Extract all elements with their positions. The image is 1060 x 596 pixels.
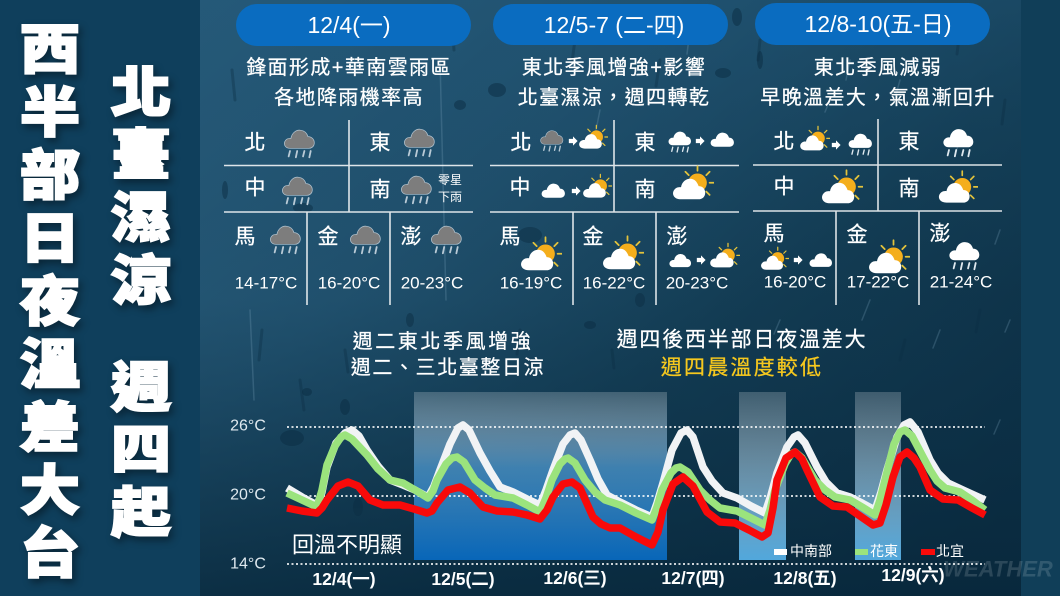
title column: 西半部日夜溫差大台	[20, 7, 80, 589]
title column: 北臺濕涼 週四起: 涼	[111, 238, 171, 316]
temperatures 12/8-10: 21-24°C	[930, 272, 992, 292]
heading 12/4: 各地降雨機率高	[274, 86, 424, 109]
heading 12/8-10: 東北季風減弱	[814, 56, 942, 79]
regions 12/4	[234, 132, 422, 248]
series: 花東	[287, 430, 985, 525]
regions 12/8-10	[764, 130, 950, 246]
background rain photo	[200, 0, 1021, 596]
legend: 中南部	[790, 543, 832, 559]
heading 12/5-7: 北臺濕涼，週四轉乾	[518, 86, 710, 109]
title column: 西半部日夜溫差大台: 大	[20, 448, 80, 526]
date labels: 12/8(五)	[773, 568, 837, 588]
series: 中南部	[287, 422, 985, 517]
legend	[774, 543, 964, 559]
heading 12/4	[246, 56, 452, 109]
date pill 12/8-10: 12/8-10(五-日)	[805, 11, 951, 37]
regions 12/5-7: 北	[510, 132, 532, 154]
temperatures 12/8-10: 17-22°C	[847, 272, 909, 292]
date labels: 12/6(三)	[543, 568, 607, 588]
regions 12/5-7	[500, 132, 688, 248]
regions 12/4: 澎	[400, 226, 422, 248]
temperatures 12/4: 16-20°C	[318, 274, 380, 292]
regions 12/8-10: 北	[774, 130, 794, 154]
title column: 西半部日夜溫差大台: 溫	[20, 322, 80, 400]
temperatures 12/4	[235, 274, 463, 292]
regions 12/4: 金	[318, 226, 338, 248]
panel: 12/8-10 forecast	[753, 3, 1002, 305]
title column: 西半部日夜溫差大台: 西	[20, 7, 80, 85]
title column: 北臺濕涼 週四起: 北	[111, 50, 171, 128]
callout: northeast monsoon: 週二東北季風增強	[353, 330, 533, 353]
regions 12/4: 東	[370, 132, 390, 154]
callout: day-night difference	[617, 328, 867, 380]
weather icons 12/4	[270, 129, 461, 253]
regions 12/8-10: 東	[898, 130, 920, 154]
left title band	[0, 0, 200, 596]
weather icons 12/5-7	[521, 125, 740, 270]
regions 12/4: 馬	[234, 226, 256, 248]
temperatures 12/8-10	[764, 272, 992, 292]
temperatures 12/5-7: 16-19°C	[500, 274, 562, 292]
title column: 北臺濕涼 週四起: 四	[111, 407, 171, 485]
regions 12/5-7: 東	[634, 132, 656, 154]
title column: 北臺濕涼 週四起: 週	[111, 345, 171, 423]
note: scattered showers	[438, 173, 462, 204]
date pill 12/5-7	[493, 4, 728, 45]
regions 12/5-7: 中	[510, 176, 530, 200]
axis labels: 20°C	[230, 486, 266, 504]
note: scattered showers: 零星	[438, 173, 462, 187]
line chart: temperature trend	[230, 392, 985, 589]
regions 12/5-7: 澎	[666, 226, 688, 248]
regions 12/4: 南	[370, 178, 390, 202]
date labels: 12/9(六)	[881, 565, 945, 585]
callout: northeast monsoon: 週二、三北臺整日涼	[351, 356, 545, 379]
note: little warming: 回溫不明顯	[292, 532, 402, 558]
date pill 12/4: 12/4(一)	[307, 12, 391, 38]
title column: 北臺濕涼 週四起: 臺	[111, 112, 171, 190]
date pill 12/4	[236, 4, 471, 46]
regions 12/8-10: 南	[898, 178, 920, 200]
title column: 北臺濕涼 週四起: 濕	[111, 175, 171, 253]
heading 12/8-10: 早晚溫差大，氣溫漸回升	[760, 86, 996, 109]
callout: day-night difference: 週四晨溫度較低	[661, 356, 823, 380]
panel: 12/4 forecast	[224, 4, 473, 305]
heading 12/5-7: 東北季風增強+影響	[522, 56, 706, 79]
cool period shading	[414, 392, 901, 560]
regions 12/4: 北	[244, 132, 266, 154]
title column: 西半部日夜溫差大台: 差	[20, 385, 80, 463]
right edge band	[1021, 0, 1060, 596]
regions 12/4: 中	[244, 176, 266, 200]
date pill 12/8-10	[755, 3, 990, 45]
title column: 西半部日夜溫差大台: 夜	[20, 259, 80, 337]
regions 12/5-7: 馬	[500, 226, 520, 248]
temperatures 12/5-7: 16-22°C	[583, 274, 645, 292]
watermark: WEATHER	[943, 556, 1053, 582]
axis labels: 26°C	[230, 418, 266, 434]
heading 12/4: 鋒面形成+華南雲雨區	[246, 56, 452, 79]
temperatures 12/4: 14-17°C	[235, 274, 297, 292]
temperatures 12/5-7: 20-23°C	[666, 274, 728, 292]
regions 12/5-7: 南	[634, 178, 656, 202]
title column: 北臺濕涼 週四起: 起	[111, 470, 171, 548]
title column: 西半部日夜溫差大台: 半	[20, 70, 80, 148]
axis labels: 14°C	[230, 556, 266, 572]
callout: day-night difference: 週四後西半部日夜溫差大	[617, 328, 867, 352]
temperatures 12/8-10: 16-20°C	[764, 272, 826, 292]
regions 12/8-10: 馬	[764, 222, 784, 246]
callout: northeast monsoon	[351, 330, 545, 379]
date labels: 12/5(二)	[431, 569, 495, 589]
axis labels	[230, 418, 266, 572]
heading 12/5-7	[518, 56, 710, 109]
legend: 花東	[870, 543, 898, 559]
temperatures 12/5-7	[500, 274, 728, 292]
temperatures 12/4: 20-23°C	[401, 274, 463, 292]
date labels: 12/4(一)	[312, 569, 376, 589]
date labels	[312, 565, 945, 589]
panel: 12/5-7 forecast	[490, 4, 740, 305]
note: scattered showers: 下雨	[438, 190, 462, 204]
weather icons 12/8-10	[761, 126, 979, 273]
date pill 12/5-7: 12/5-7 (二-四)	[544, 12, 684, 38]
regions 12/8-10: 金	[846, 224, 868, 246]
title column: 西半部日夜溫差大台: 日	[20, 196, 80, 274]
regions 12/5-7: 金	[582, 226, 604, 248]
heading 12/8-10	[760, 56, 996, 109]
date labels: 12/7(四)	[661, 568, 725, 588]
legend: 北宜	[936, 543, 964, 559]
regions 12/8-10: 中	[774, 176, 794, 198]
series: 北宜	[287, 452, 985, 545]
title column: 西半部日夜溫差大台: 台	[20, 511, 80, 589]
title column: 西半部日夜溫差大台: 部	[20, 133, 80, 211]
title column: 北臺濕涼 週四起	[111, 50, 171, 548]
regions 12/8-10: 澎	[930, 222, 950, 246]
